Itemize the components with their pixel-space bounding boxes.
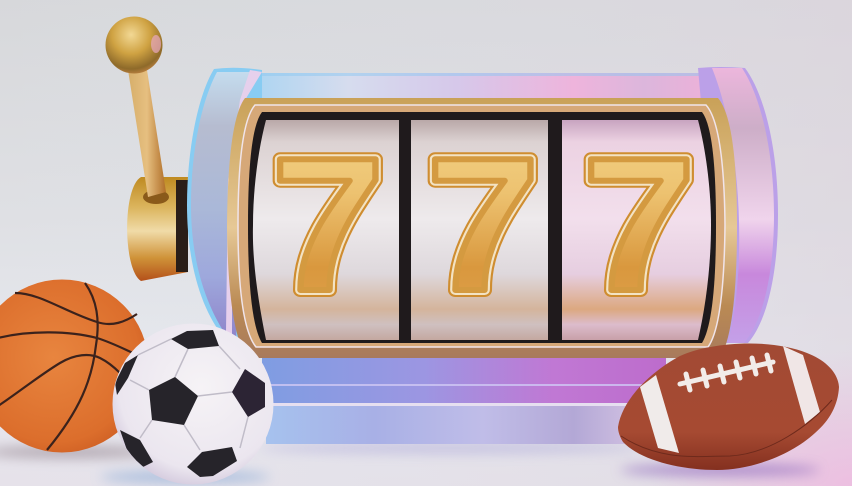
seven 2: 7 (426, 119, 539, 331)
seven 1: 7 (271, 119, 384, 331)
pink glow corner (650, 350, 852, 486)
reel 3 (562, 120, 711, 340)
football stripes (640, 375, 679, 453)
gold frame (227, 98, 737, 358)
basketball (0, 280, 148, 452)
seven 3: 7 (582, 119, 695, 331)
machine base (262, 352, 666, 444)
base upper band (262, 352, 666, 406)
reel window (248, 112, 716, 343)
reel 1 (253, 120, 399, 340)
soccer panels (115, 330, 265, 477)
base plinth (266, 405, 628, 444)
left drum cap (187, 68, 262, 345)
soccer ball (112, 324, 274, 484)
football laces (680, 355, 773, 390)
sevens (271, 119, 695, 331)
machine body (187, 67, 778, 358)
lever (106, 16, 188, 281)
seven 3: 7 (582, 119, 695, 331)
top band (245, 73, 715, 103)
reel 2 (411, 120, 548, 340)
lever arm (128, 70, 166, 197)
lever knob (106, 16, 162, 74)
frame inner trim (238, 105, 725, 347)
football seam (621, 400, 832, 457)
seven 1: 7 (271, 119, 384, 331)
floor shadows (0, 443, 820, 483)
right drum cap (698, 67, 778, 343)
seven 2: 7 (426, 119, 539, 331)
american football (618, 343, 839, 470)
seven 2: 7 (426, 119, 539, 331)
lever hub (127, 177, 188, 281)
seven 3: 7 (582, 119, 695, 331)
soccer seams (130, 339, 248, 450)
seven 1: 7 (271, 119, 384, 331)
